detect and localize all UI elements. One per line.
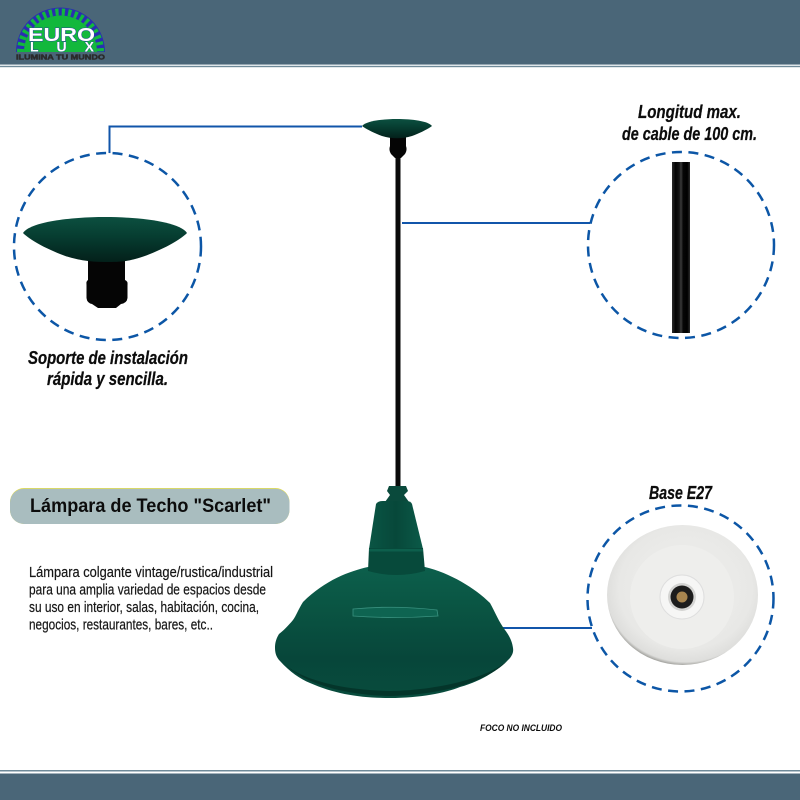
socket contact [676,592,688,602]
panel: installation bracket detail [14,153,201,340]
top header band [0,0,800,67]
dashed circle [14,153,201,340]
logo: Eurolux [16,8,105,61]
caption: cable length: Longitud max. [638,102,741,122]
lamp collar [368,548,425,575]
description text: para una amplia variedad de espacios desde [29,582,266,598]
dashed circle [588,152,774,338]
logo: Eurolux: ILUMINA TU MUNDO [16,52,105,62]
socket [668,583,696,611]
panel: E27 base detail [588,506,774,692]
connector: lamp to base circle [503,627,592,629]
lamp shade [275,567,513,698]
logo: Eurolux: LUX [30,38,95,54]
shade interior [607,525,758,665]
icon: bracket socket [86,258,128,308]
caption: cable length [622,102,757,144]
socket collar [660,575,704,619]
caption: bracket [28,348,188,389]
ceiling socket [389,136,407,158]
bottom footer band [0,770,800,800]
connector: canopy to left circle [110,126,362,155]
lamp cable [396,156,400,490]
description text: su uso en interior, salas, habitación, cocina, [29,600,259,616]
caption: bracket: rápida y sencilla. [47,369,168,389]
caption: cable length: de cable de 100 cm. [622,124,757,144]
note: bulb not included: FOCO NO INCLUIDO [480,723,563,734]
title pill [10,488,290,524]
description text: Lámpara colgante vintage/rustica/industrial [29,565,273,581]
caption: bracket: Soporte de instalación [28,348,188,368]
lamp cone [369,501,423,549]
panel: cable detail [588,152,774,338]
dashed circle [588,506,774,692]
inner ring [630,545,734,649]
description text [29,565,273,634]
ceiling canopy [362,119,432,138]
title: Lámpara de Techo "Scarlet" [30,496,271,517]
cable close-up [672,162,690,333]
logo: Eurolux: EURO [28,25,95,45]
connector: cable to right circle [402,222,590,224]
shade rim shadow [280,658,510,696]
shade highlight [353,607,438,618]
lamp neck knob [385,486,409,502]
description text: negocios, restaurantes, bares, etc.. [29,618,213,634]
pendant lamp illustration [275,119,513,698]
caption: base E27: Base E27 [649,483,713,503]
icon: bracket canopy [23,217,187,262]
